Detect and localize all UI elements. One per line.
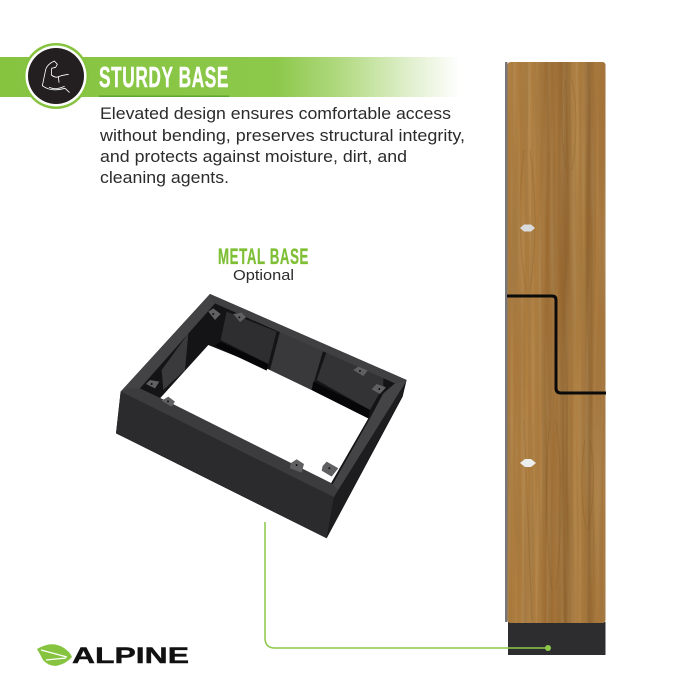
lower door handle xyxy=(520,459,536,467)
heading: sturdy base: STURDY BASE xyxy=(99,62,229,94)
right outer side xyxy=(327,383,405,538)
body text: cleaning agents. xyxy=(100,168,229,187)
callout dot xyxy=(545,645,551,651)
logo: alpine xyxy=(37,643,189,668)
locker side edge xyxy=(505,62,508,622)
upper door handle xyxy=(520,224,535,232)
body text: and protects against moisture, dirt, and xyxy=(100,147,407,166)
locker xyxy=(505,62,606,655)
back wall panels xyxy=(215,312,383,418)
locker metal base xyxy=(508,622,606,655)
body text: without bending, preserves structural integrity, xyxy=(99,126,465,145)
left rim xyxy=(121,294,215,392)
callout line to base xyxy=(265,522,548,648)
header banner xyxy=(0,57,460,97)
locker wood doors xyxy=(507,62,606,623)
label: metal base: METAL BASE xyxy=(218,244,309,269)
base silhouette xyxy=(116,294,407,538)
back rim xyxy=(210,294,407,383)
front face xyxy=(116,392,334,538)
metal base product photo xyxy=(116,294,407,538)
label: optional: Optional xyxy=(233,267,294,284)
heading underline xyxy=(99,96,229,97)
center opening xyxy=(160,345,368,485)
body text: Elevated design ensures comfortable access xyxy=(100,104,451,123)
door seam xyxy=(507,296,606,393)
logo wordmark: ALPINE xyxy=(72,643,189,668)
tab holes xyxy=(151,313,380,469)
icon: flexed arm badge xyxy=(23,43,89,109)
right rim xyxy=(332,380,407,490)
body text xyxy=(99,104,465,187)
logo leaf xyxy=(37,644,72,666)
left wall panel xyxy=(162,333,188,390)
mounting tabs xyxy=(146,308,386,477)
front rim xyxy=(121,388,338,497)
